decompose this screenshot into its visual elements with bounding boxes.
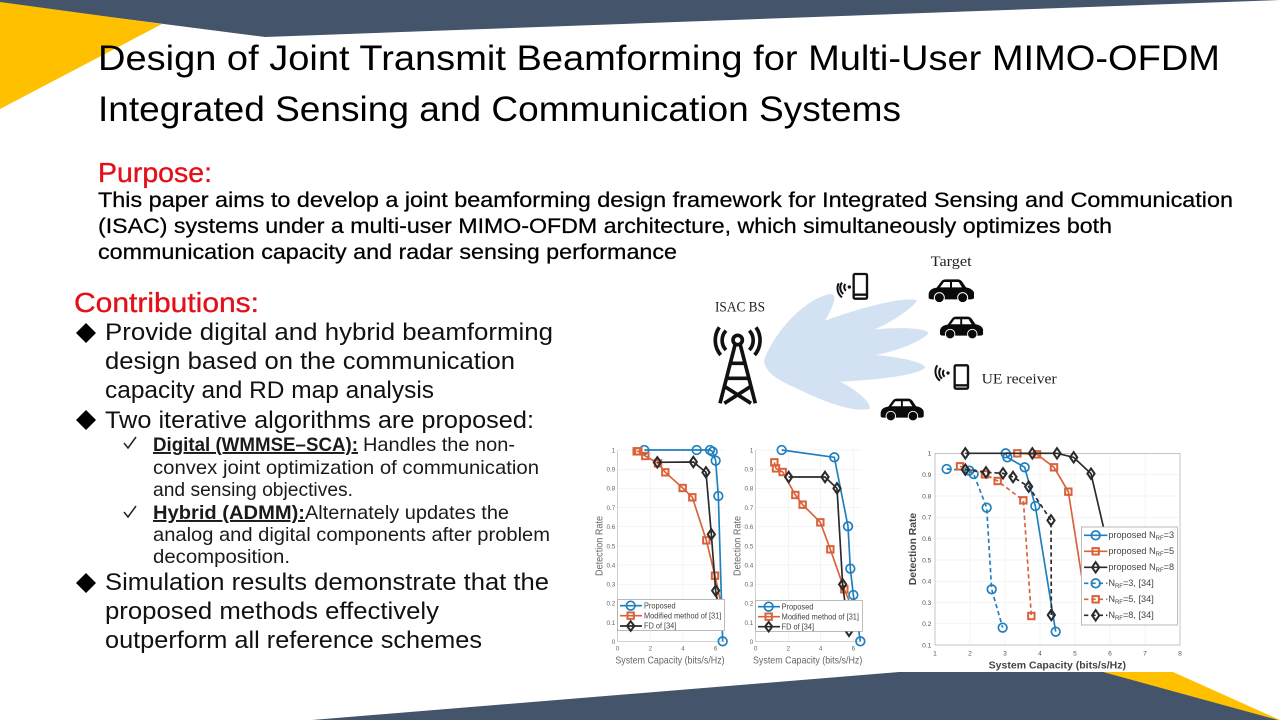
y tick labels: 0 — [750, 639, 754, 646]
legend: RF — [1115, 584, 1123, 590]
x tick labels: 7 — [1143, 651, 1147, 658]
top banner: yellow triangle — [0, 2, 162, 109]
legend: RF — [1115, 600, 1123, 606]
sub-bullet: hybrid: decomposition. — [153, 546, 290, 568]
x tick labels: 1 — [933, 651, 937, 658]
y tick labels: 1 — [928, 451, 932, 458]
legend: FD of [34] — [644, 622, 676, 631]
bottom banner: yellow accent — [1100, 672, 1280, 720]
series: modified method — [633, 448, 722, 607]
y tick labels: 0.6 — [922, 536, 932, 543]
chart: detection rate, digital — [594, 446, 727, 666]
y tick labels: 0.8 — [745, 486, 754, 493]
y tick labels: 0.8 — [922, 493, 932, 500]
x tick labels: 3 — [1003, 651, 1007, 658]
series: proposed — [777, 446, 865, 646]
bullet: simulation results — [76, 569, 549, 654]
x tick labels — [616, 646, 718, 653]
legend — [756, 600, 862, 631]
y axis title: Detection Rate — [908, 512, 919, 585]
y tick labels — [607, 447, 616, 646]
chart: detection rate vs RF chains — [908, 448, 1182, 672]
y tick labels: 0.7 — [922, 515, 932, 522]
series: proposed NRF=3 — [1001, 449, 1060, 636]
y tick labels: 0 — [612, 639, 616, 646]
purpose text: (ISAC) systems under a multi-user MIMO-OFDM architecture, which simultaneously optimizes both — [98, 214, 1112, 238]
label: UE receiver: UE receiver — [982, 371, 1057, 387]
y tick labels: 0.9 — [607, 467, 616, 474]
legend: Proposed — [644, 601, 676, 610]
y axis title: Detection Rate — [594, 516, 605, 576]
legend: =5, [34] — [1123, 594, 1154, 604]
legend: RF — [1115, 616, 1123, 622]
series: NRF=8 [34] — [962, 464, 1055, 620]
panel: purpose — [98, 157, 1233, 264]
bullet: beamforming design: design based on the communication — [105, 348, 515, 375]
legend: RF — [1156, 552, 1164, 558]
y tick labels: 1 — [750, 447, 754, 454]
x tick labels: 8 — [1178, 651, 1182, 658]
legend: N — [1108, 594, 1115, 604]
x tick labels: 2 — [968, 651, 972, 658]
y tick labels — [922, 451, 932, 649]
sub-bullet: digital — [124, 434, 539, 501]
x axis title: System Capacity (bits/s/Hz) — [615, 655, 725, 666]
sub-bullet: digital: Handles the non- — [363, 434, 515, 456]
beam pattern — [764, 294, 929, 410]
bullet: simulation results: outperform all reference schemes — [105, 627, 482, 654]
legend: Modified method of [31] — [644, 611, 721, 620]
y tick labels: 0.6 — [607, 524, 616, 531]
series: proposed — [640, 446, 727, 646]
legend: RF — [1156, 536, 1164, 542]
y tick labels: 0.1 — [922, 642, 932, 649]
purpose text — [98, 188, 1233, 264]
sub-bullet: hybrid: Hybrid (ADMM): — [153, 502, 305, 524]
x tick labels — [933, 651, 1182, 658]
bullet: two algorithms: Two iterative algorithms are proposed: — [105, 407, 534, 434]
sub-bullet: hybrid: analog and digital components after problem — [153, 524, 550, 546]
purpose heading: Purpose: — [98, 157, 212, 188]
icon: target car 2 — [940, 317, 983, 339]
x tick labels — [754, 646, 856, 653]
legend: FD of [34] — [782, 622, 814, 631]
y tick labels: 0.7 — [745, 505, 754, 512]
legend: =3 — [1164, 530, 1174, 540]
sub-bullet: hybrid — [124, 502, 550, 568]
y axis title: Detection Rate — [733, 516, 744, 576]
y tick labels: 0.1 — [607, 620, 616, 627]
legend — [618, 599, 724, 631]
icon: target car 1 — [929, 279, 974, 303]
icon: tower — [715, 327, 760, 403]
legend: Proposed — [782, 602, 813, 611]
series: FD — [654, 457, 719, 607]
legend — [1081, 527, 1177, 625]
y tick labels — [745, 447, 754, 646]
legend: =3, [34] — [1123, 578, 1154, 588]
x tick labels: 0 — [754, 646, 758, 653]
y tick labels: 1 — [612, 447, 616, 454]
y tick labels: 0.1 — [745, 620, 754, 627]
x tick labels: 2 — [649, 646, 653, 653]
chart: detection rate, hybrid — [733, 446, 865, 666]
bullet: simulation results: proposed methods effectively — [105, 598, 439, 625]
title: Integrated Sensing and Communication Systems — [98, 90, 901, 129]
y tick labels: 0.3 — [607, 582, 616, 589]
icon: target car 3 — [881, 399, 924, 421]
x tick labels: 5 — [1073, 651, 1077, 658]
y tick labels: 0.3 — [745, 582, 754, 589]
y tick labels: 0.4 — [745, 562, 754, 569]
legend: =5 — [1164, 546, 1174, 556]
label: Target: Target — [931, 254, 972, 270]
panel: contributions — [74, 287, 553, 654]
y tick labels: 0.2 — [745, 601, 754, 608]
bullet: beamforming design: Provide digital and hybrid beamforming — [105, 319, 553, 346]
x tick labels: 6 — [852, 646, 856, 653]
series: NRF=5 [34] — [957, 463, 1035, 619]
top banner: slate band — [0, 0, 1280, 37]
purpose text: This paper aims to develop a joint beamforming design framework for Integrated Sensing and Communication — [98, 188, 1233, 212]
sub-bullet: digital: Digital (WMMSE–SCA): — [153, 434, 358, 456]
title — [98, 39, 1220, 129]
y tick labels: 0.7 — [607, 505, 616, 512]
x axis title: System Capacity (bits/s/Hz) — [753, 655, 862, 666]
y tick labels: 0.5 — [745, 543, 754, 550]
y tick labels: 0.9 — [745, 467, 754, 474]
icon: phone upper — [838, 274, 867, 299]
bottom banner: slate band — [312, 672, 1278, 720]
label: ISAC BS: ISAC BS — [715, 300, 765, 316]
series: FD — [785, 472, 852, 636]
bullet: beamforming design: capacity and RD map analysis — [105, 377, 434, 404]
legend: proposed N — [1108, 546, 1156, 556]
legend: =8, [34] — [1123, 610, 1154, 620]
legend: proposed N — [1108, 562, 1156, 572]
y tick labels: 0.6 — [745, 524, 754, 531]
contributions heading: Contributions: — [74, 287, 259, 318]
title: Design of Joint Transmit Beamforming for Multi-User MIMO-OFDM — [98, 39, 1220, 78]
legend: N — [1108, 578, 1115, 588]
x tick labels: 4 — [819, 646, 823, 653]
series: proposed NRF=8 — [962, 448, 1103, 527]
y tick labels: 0.4 — [922, 579, 932, 586]
y tick labels: 0.2 — [607, 601, 616, 608]
icon: phone lower — [935, 365, 968, 389]
series: modified method — [771, 459, 852, 607]
sub-bullet: digital: convex joint optimization of communication — [153, 457, 539, 479]
bullet: beamforming design — [76, 319, 553, 404]
series: NRF=3 [34] — [942, 465, 1007, 632]
y tick labels: 0.8 — [607, 486, 616, 493]
y tick labels: 0.5 — [922, 557, 932, 564]
y tick labels: 0.9 — [922, 472, 932, 479]
x tick labels: 4 — [1038, 651, 1042, 658]
legend: proposed N — [1108, 530, 1156, 540]
legend: N — [1108, 610, 1115, 620]
x tick labels: 6 — [714, 646, 718, 653]
legend: Modified method of [31] — [782, 612, 859, 621]
x tick labels: 4 — [681, 646, 685, 653]
purpose text: communication capacity and radar sensing performance — [98, 240, 677, 264]
x tick labels: 0 — [616, 646, 620, 653]
y tick labels: 0.3 — [922, 600, 932, 607]
sub-bullet: digital: and sensing objectives. — [153, 479, 353, 501]
y tick labels: 0.4 — [607, 562, 616, 569]
x axis title: System Capacity (bits/s/Hz) — [989, 661, 1126, 672]
y tick labels: 0.2 — [922, 621, 932, 628]
diagram: ISAC scenario — [715, 254, 1057, 421]
legend: RF — [1156, 568, 1164, 574]
x tick labels: 2 — [787, 646, 791, 653]
y tick labels: 0.5 — [607, 543, 616, 550]
series: proposed NRF=5 — [1014, 450, 1083, 587]
legend: =8 — [1164, 562, 1174, 572]
sub-bullet: hybrid: Alternately updates the — [305, 502, 509, 524]
bullet: simulation results: Simulation results demonstrate that the — [105, 569, 549, 596]
x tick labels: 6 — [1108, 651, 1112, 658]
